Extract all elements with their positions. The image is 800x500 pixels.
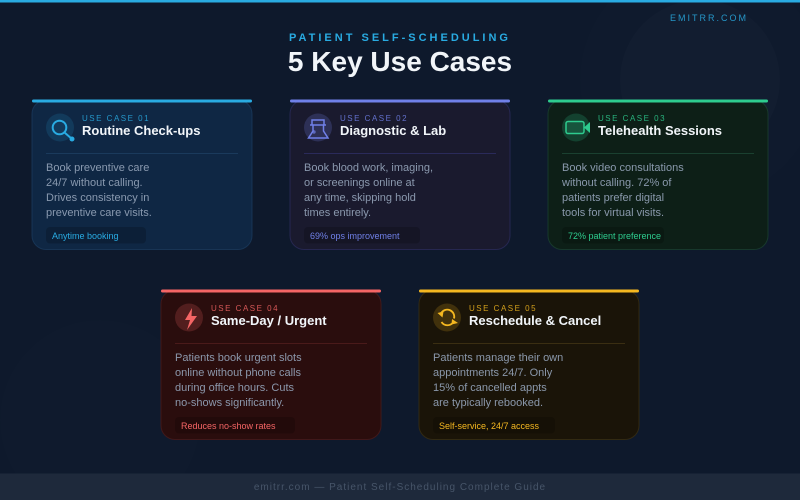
tag: 69% ops improvement <box>310 231 400 241</box>
tag: 72% patient preference <box>568 231 661 241</box>
eyebrow heading: PATIENT SELF-SCHEDULING <box>289 32 511 44</box>
icon: lightning bolt <box>175 304 203 332</box>
description: tools for virtual visits. <box>562 207 664 219</box>
panel: use case 04 same-day urgent: USE CASE 04 <box>211 304 279 313</box>
description: during office hours. Cuts <box>175 382 295 394</box>
description: preventive care visits. <box>46 207 152 219</box>
panel: use case 01 routine check-ups: USE CASE 01 <box>82 114 150 123</box>
description: Patients manage their own <box>433 352 563 364</box>
panel: use case 02 diagnostic and lab <box>290 100 510 250</box>
panel: use case 03 telehealth sessions: Telehealth Sessions <box>598 123 722 138</box>
title: 5 Key Use Cases <box>288 46 512 77</box>
tag: Anytime booking <box>52 231 119 241</box>
tag: Self-service, 24/7 access <box>439 421 540 431</box>
panel: use case 02 diagnostic and lab: Diagnostic & Lab <box>340 123 446 138</box>
description: times entirely. <box>304 207 371 219</box>
tag: Reduces no-show rates <box>181 421 276 431</box>
footer: emitrr.com — Patient Self-Scheduling Complete Guide <box>254 482 546 493</box>
footer <box>0 474 800 500</box>
website label: EMITRR.COM <box>670 13 748 23</box>
panel: use case 01 routine check-ups: Routine Check-ups <box>82 123 200 138</box>
header <box>288 32 512 77</box>
panel: use case 01 routine check-ups <box>32 100 252 250</box>
description: no-shows significantly. <box>175 397 284 409</box>
panel: use case 04 same-day urgent <box>161 290 381 440</box>
description: without calling. 72% of <box>561 177 672 189</box>
panel: use case 02 diagnostic and lab: USE CASE 02 <box>340 114 408 123</box>
tag <box>433 417 555 434</box>
panel: use case 03 telehealth sessions: USE CASE 03 <box>598 114 666 123</box>
tag <box>175 417 295 434</box>
description: any time, skipping hold <box>304 192 416 204</box>
description: or screenings online at <box>304 177 415 189</box>
description: 15% of cancelled appts <box>433 382 547 394</box>
icon: video camera <box>562 114 590 142</box>
description: are typically rebooked. <box>433 397 543 409</box>
description: Book video consultations <box>562 162 684 174</box>
panel: use case 05 reschedule and cancel: Reschedule & Cancel <box>469 313 601 328</box>
panel: use case 04 same-day urgent: Same-Day / Urgent <box>211 313 327 328</box>
description: patients prefer digital <box>562 192 664 204</box>
description: Patients book urgent slots <box>175 352 302 364</box>
icon: lab flask <box>304 114 332 142</box>
tag <box>46 227 146 244</box>
description: Drives consistency in <box>46 192 149 204</box>
description: Book blood work, imaging, <box>304 162 433 174</box>
panel: use case 05 reschedule and cancel <box>419 290 639 440</box>
description: 24/7 without calling. <box>46 177 143 189</box>
description: appointments 24/7. Only <box>433 367 553 379</box>
icon: magnifying glass <box>46 114 74 142</box>
description: online without phone calls <box>175 367 301 379</box>
icon: cycle arrows <box>433 304 461 332</box>
tag <box>562 227 664 244</box>
panel: use case 05 reschedule and cancel: USE CASE 05 <box>469 304 537 313</box>
description: Book preventive care <box>46 162 149 174</box>
tag <box>304 227 420 244</box>
panel: use case 03 telehealth sessions <box>548 100 768 250</box>
